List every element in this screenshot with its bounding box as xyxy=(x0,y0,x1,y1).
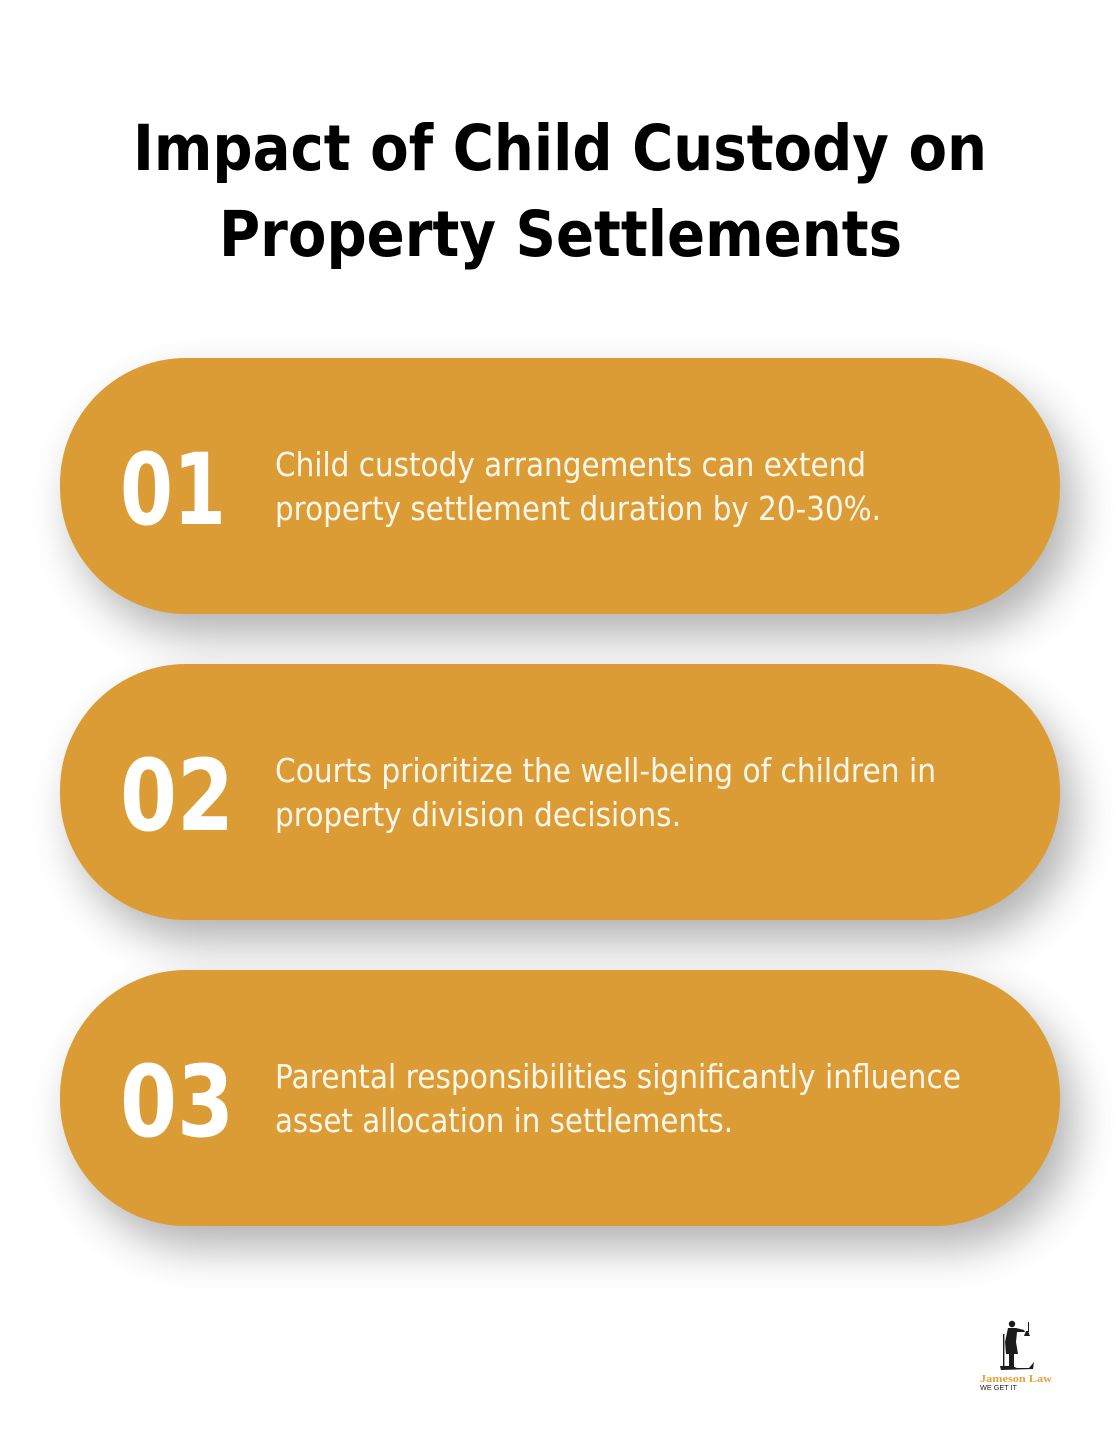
number 03: 03 xyxy=(120,1045,234,1160)
text: item 01 xyxy=(275,446,881,528)
text: item 02: property division decisions. xyxy=(275,796,681,834)
number 01: 01 xyxy=(120,433,226,548)
tagline: WE GET IT xyxy=(980,1385,1018,1392)
title xyxy=(133,111,987,271)
title: Impact of Child Custody on xyxy=(133,111,987,185)
panel: item 03 xyxy=(60,970,1074,1248)
text: item 02 xyxy=(275,752,936,834)
logo: Jameson Law xyxy=(980,1321,1052,1392)
panel: item 01 xyxy=(60,358,1074,636)
title: Property Settlements xyxy=(219,197,902,271)
text: item 02: Courts prioritize the well-being of children in xyxy=(275,752,936,790)
panel: item 02 xyxy=(60,664,1074,942)
text: item 03: Parental responsibilities significantly influence xyxy=(275,1058,961,1096)
brand name: Jameson Law xyxy=(980,1373,1052,1385)
text: item 01: Child custody arrangements can extend xyxy=(275,446,866,484)
text: item 03 xyxy=(275,1058,961,1140)
number 02: 02 xyxy=(120,739,234,854)
text: item 03: asset allocation in settlements. xyxy=(275,1102,733,1140)
icon: lady justice xyxy=(1000,1321,1034,1370)
text: item 01: property settlement duration by 20-30%. xyxy=(275,490,881,528)
